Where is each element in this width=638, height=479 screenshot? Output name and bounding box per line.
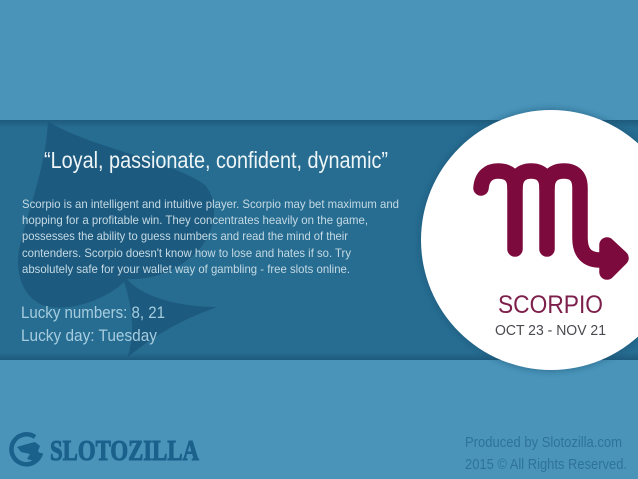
text block: description — [22, 197, 399, 276]
panel: zodiac circle — [419, 108, 638, 372]
icon: spade watermark — [18, 121, 217, 358]
heading: sign name: SCORPIO — [498, 291, 603, 319]
text: logo wordmark: SLOTOZILLA — [50, 436, 200, 467]
text block: description: contenders. Scorpio doesn't know how to lose and hates if so. Try — [22, 246, 351, 260]
text block: description: hopping for a profitable win. They concentrates heavily on the game, — [22, 213, 368, 227]
icon: scorpio glyph — [481, 171, 621, 272]
icon: dragon ring — [11, 434, 41, 464]
text block: lucky info: Lucky day: Tuesday — [21, 326, 157, 345]
text: date range: OCT 23 - NOV 21 — [495, 323, 606, 339]
text block: description: possesses the ability to guess numbers and read the mind of their — [22, 229, 348, 243]
text block: lucky info: Lucky numbers: 8, 21 — [21, 303, 165, 322]
text block: description: absolutely safe for your wallet way of gambling - free slots online. — [22, 262, 350, 276]
panel: dark band — [0, 120, 638, 360]
text block: lucky info — [21, 303, 165, 345]
text block: credits — [465, 434, 627, 473]
heading: quote: “Loyal, passionate, confident, dynamic” — [44, 147, 388, 173]
text block: description: Scorpio is an intelligent and intuitive player. Scorpio may bet maximum and — [22, 197, 399, 211]
logo: slotozilla — [11, 434, 200, 467]
